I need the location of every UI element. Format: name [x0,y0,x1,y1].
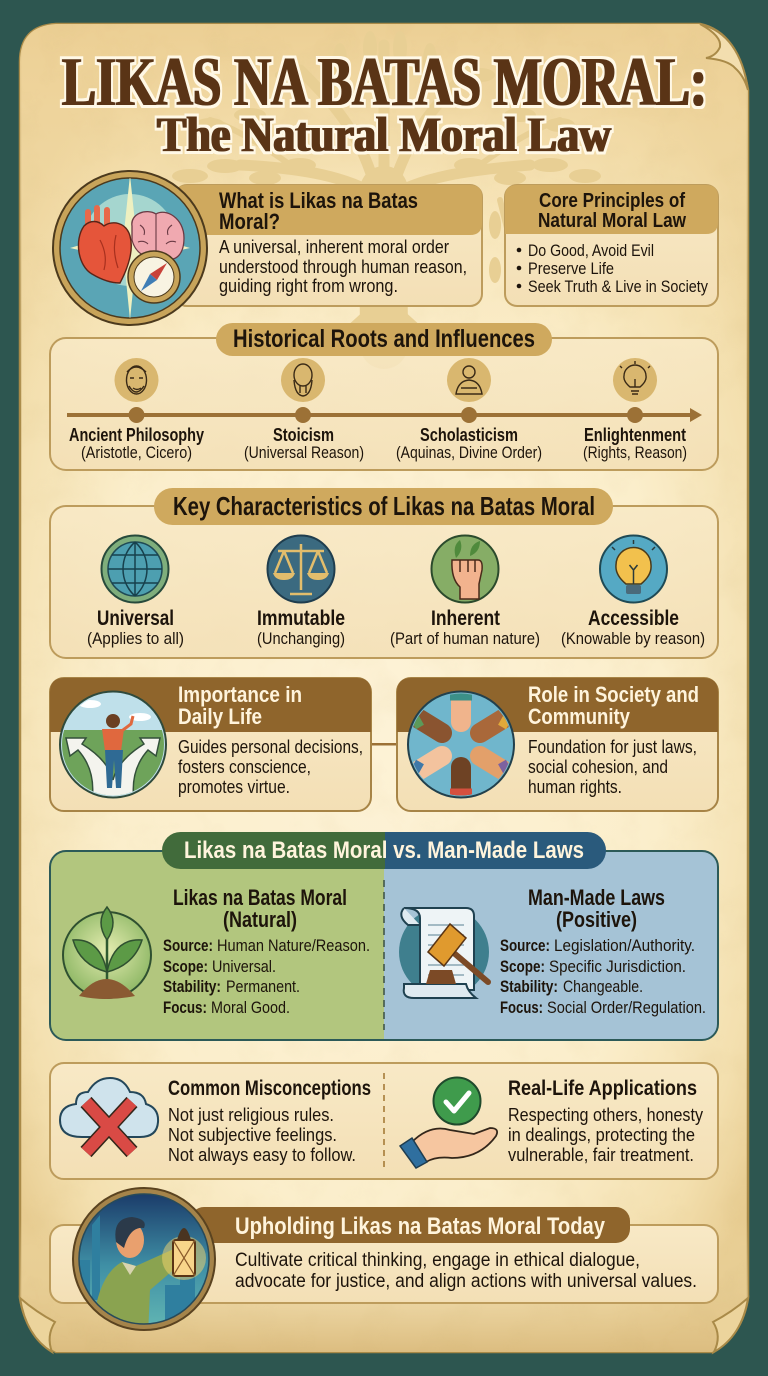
title: The Natural Moral Law [157,106,611,162]
characteristic labels: (Part of human nature) [390,629,540,648]
panel: historical roots [50,323,718,470]
natural law column [163,885,370,1017]
icon: joined hands [408,692,514,798]
icon: crossroads [60,692,166,800]
timeline labels: Scholasticism [420,425,518,445]
body text: A universal, inherent moral order [219,237,449,257]
bullet list: Do Good, Avoid Evil [528,242,654,260]
icon: scholastic figure [447,358,491,402]
natural law column: Universal. [212,957,276,976]
icon: cloud with red cross [60,1078,158,1152]
icon: fist and leaves [432,536,498,602]
timeline labels: (Aristotle, Cicero) [81,444,192,462]
heading: Moral? [219,209,280,234]
misconceptions text: Not subjective feelings. [168,1125,337,1145]
natural law column: (Natural) [223,907,297,932]
man-made law column: Focus: [500,998,543,1017]
icon: check in open hand [400,1078,497,1168]
body text [219,237,467,296]
icon: scales [268,536,334,602]
heading pill: Likas na Batas Moral vs. Man-Made Laws [184,837,584,864]
body text [528,737,697,797]
characteristic labels: Immutable [257,607,345,630]
icon: heart, brain and compass medallion [53,171,207,325]
man-made law column: Scope: [500,957,545,976]
heading pill: Key Characteristics of Likas na Batas Moral [173,491,595,521]
body text: human rights. [528,777,622,797]
heading: Daily Life [178,704,262,729]
natural law column: Permanent. [226,977,300,996]
heading banner [190,1207,630,1243]
natural law column: Likas na Batas Moral [173,885,347,910]
applications text: Respecting others, honesty [508,1105,703,1125]
timeline labels: (Rights, Reason) [583,444,687,462]
panel: role in society [397,678,718,811]
applications text: Real-Life Applications [508,1077,697,1100]
panel: core principles [505,185,718,306]
natural law column: Focus: [163,998,207,1017]
heading [528,682,699,729]
man-made law column: Stability: [500,977,558,996]
icon: glowing bulb [600,536,667,602]
title [62,44,707,162]
man-made law column: Source: [500,936,550,955]
misconceptions text: Not just religious rules. [168,1105,334,1125]
characteristic labels: (Applies to all) [87,629,184,648]
characteristic labels: Accessible [588,607,679,630]
characteristic labels: (Knowable by reason) [561,629,705,648]
icon: globe [102,536,168,602]
icon: sprout [63,907,151,999]
body text: Guides personal decisions, [178,737,363,757]
natural law column: Moral Good. [211,998,290,1017]
body text: guiding right from wrong. [219,276,398,296]
body text: fosters conscience, [178,757,311,777]
misconceptions text: Common Misconceptions [168,1077,371,1100]
heading: What is Likas na Batas [219,188,418,213]
body text: promotes virtue. [178,777,290,797]
man-made law column: Man-Made Laws [528,885,665,910]
heading pill [162,832,606,869]
timeline labels: Enlightenment [584,425,686,445]
heading: Core Principles of [539,190,685,212]
natural law column: Stability: [163,977,221,996]
heading: Community [528,704,631,729]
panel: importance in daily life [50,678,371,811]
icon: person with lantern [73,1188,215,1335]
man-made law column: Specific Jurisdiction. [549,957,686,976]
man-made law column: Legislation/Authority. [554,936,695,955]
applications text: in dealings, protecting the [508,1125,695,1145]
tree watermark [172,31,601,345]
body text: understood through human reason, [219,257,467,277]
body text [235,1250,697,1292]
corner curl: bottom right [713,1298,748,1352]
bullet list: Preserve Life [528,260,614,278]
characteristic labels: Universal [97,607,174,630]
timeline labels: (Universal Reason) [244,444,364,462]
body text: advocate for justice, and align actions with universal values. [235,1271,697,1292]
misconceptions text: Not always easy to follow. [168,1145,356,1165]
panel: misconceptions and applications [50,1063,718,1179]
natural law column: Source: [163,936,213,955]
characteristic labels: (Unchanging) [257,629,345,648]
timeline labels [69,425,687,462]
connector [370,743,398,746]
bullet list: Seek Truth & Live in Society [528,278,709,296]
panel: upholding today [50,1188,718,1335]
timeline labels: Ancient Philosophy [69,425,204,445]
body text [178,737,363,797]
panel: what is [175,185,482,306]
heading pill [154,488,613,525]
body text: Cultivate critical thinking, engage in ethical dialogue, [235,1250,640,1271]
timeline labels: Stoicism [273,425,334,445]
characteristic labels: Inherent [431,607,500,630]
icon: ancient philosopher [114,358,158,402]
heading [538,190,686,232]
natural law column: Scope: [163,957,208,976]
icon: lightbulb [613,358,657,402]
heading [219,188,418,234]
applications text [508,1077,703,1165]
heading: Role in Society and [528,682,699,707]
heading: Natural Moral Law [538,210,686,232]
body text: Foundation for just laws, [528,737,697,757]
corner curl: top right [700,24,748,90]
heading [178,682,302,729]
timeline arrow [67,407,702,423]
timeline labels: (Aquinas, Divine Order) [396,444,542,462]
man-made law column: Social Order/Regulation. [547,998,706,1017]
icon: stoic bust [281,358,325,402]
corner curl: bottom left [20,1298,55,1352]
heading: Importance in [178,682,302,707]
body text: social cohesion, and [528,757,668,777]
man-made law column: Changeable. [563,977,643,996]
applications text: vulnerable, fair treatment. [508,1145,694,1165]
man-made law column: (Positive) [556,907,637,932]
heading pill: Historical Roots and Influences [233,325,535,353]
panel: key characteristics [50,488,718,658]
icon: scroll and gavel [399,907,489,998]
heading banner: Upholding Likas na Batas Moral Today [235,1213,606,1240]
panel: comparison [50,832,718,1040]
man-made law column [500,885,706,1017]
characteristic labels [87,607,705,648]
bullet list [517,242,709,296]
natural law column: Human Nature/Reason. [217,936,370,955]
misconceptions text [168,1077,371,1165]
